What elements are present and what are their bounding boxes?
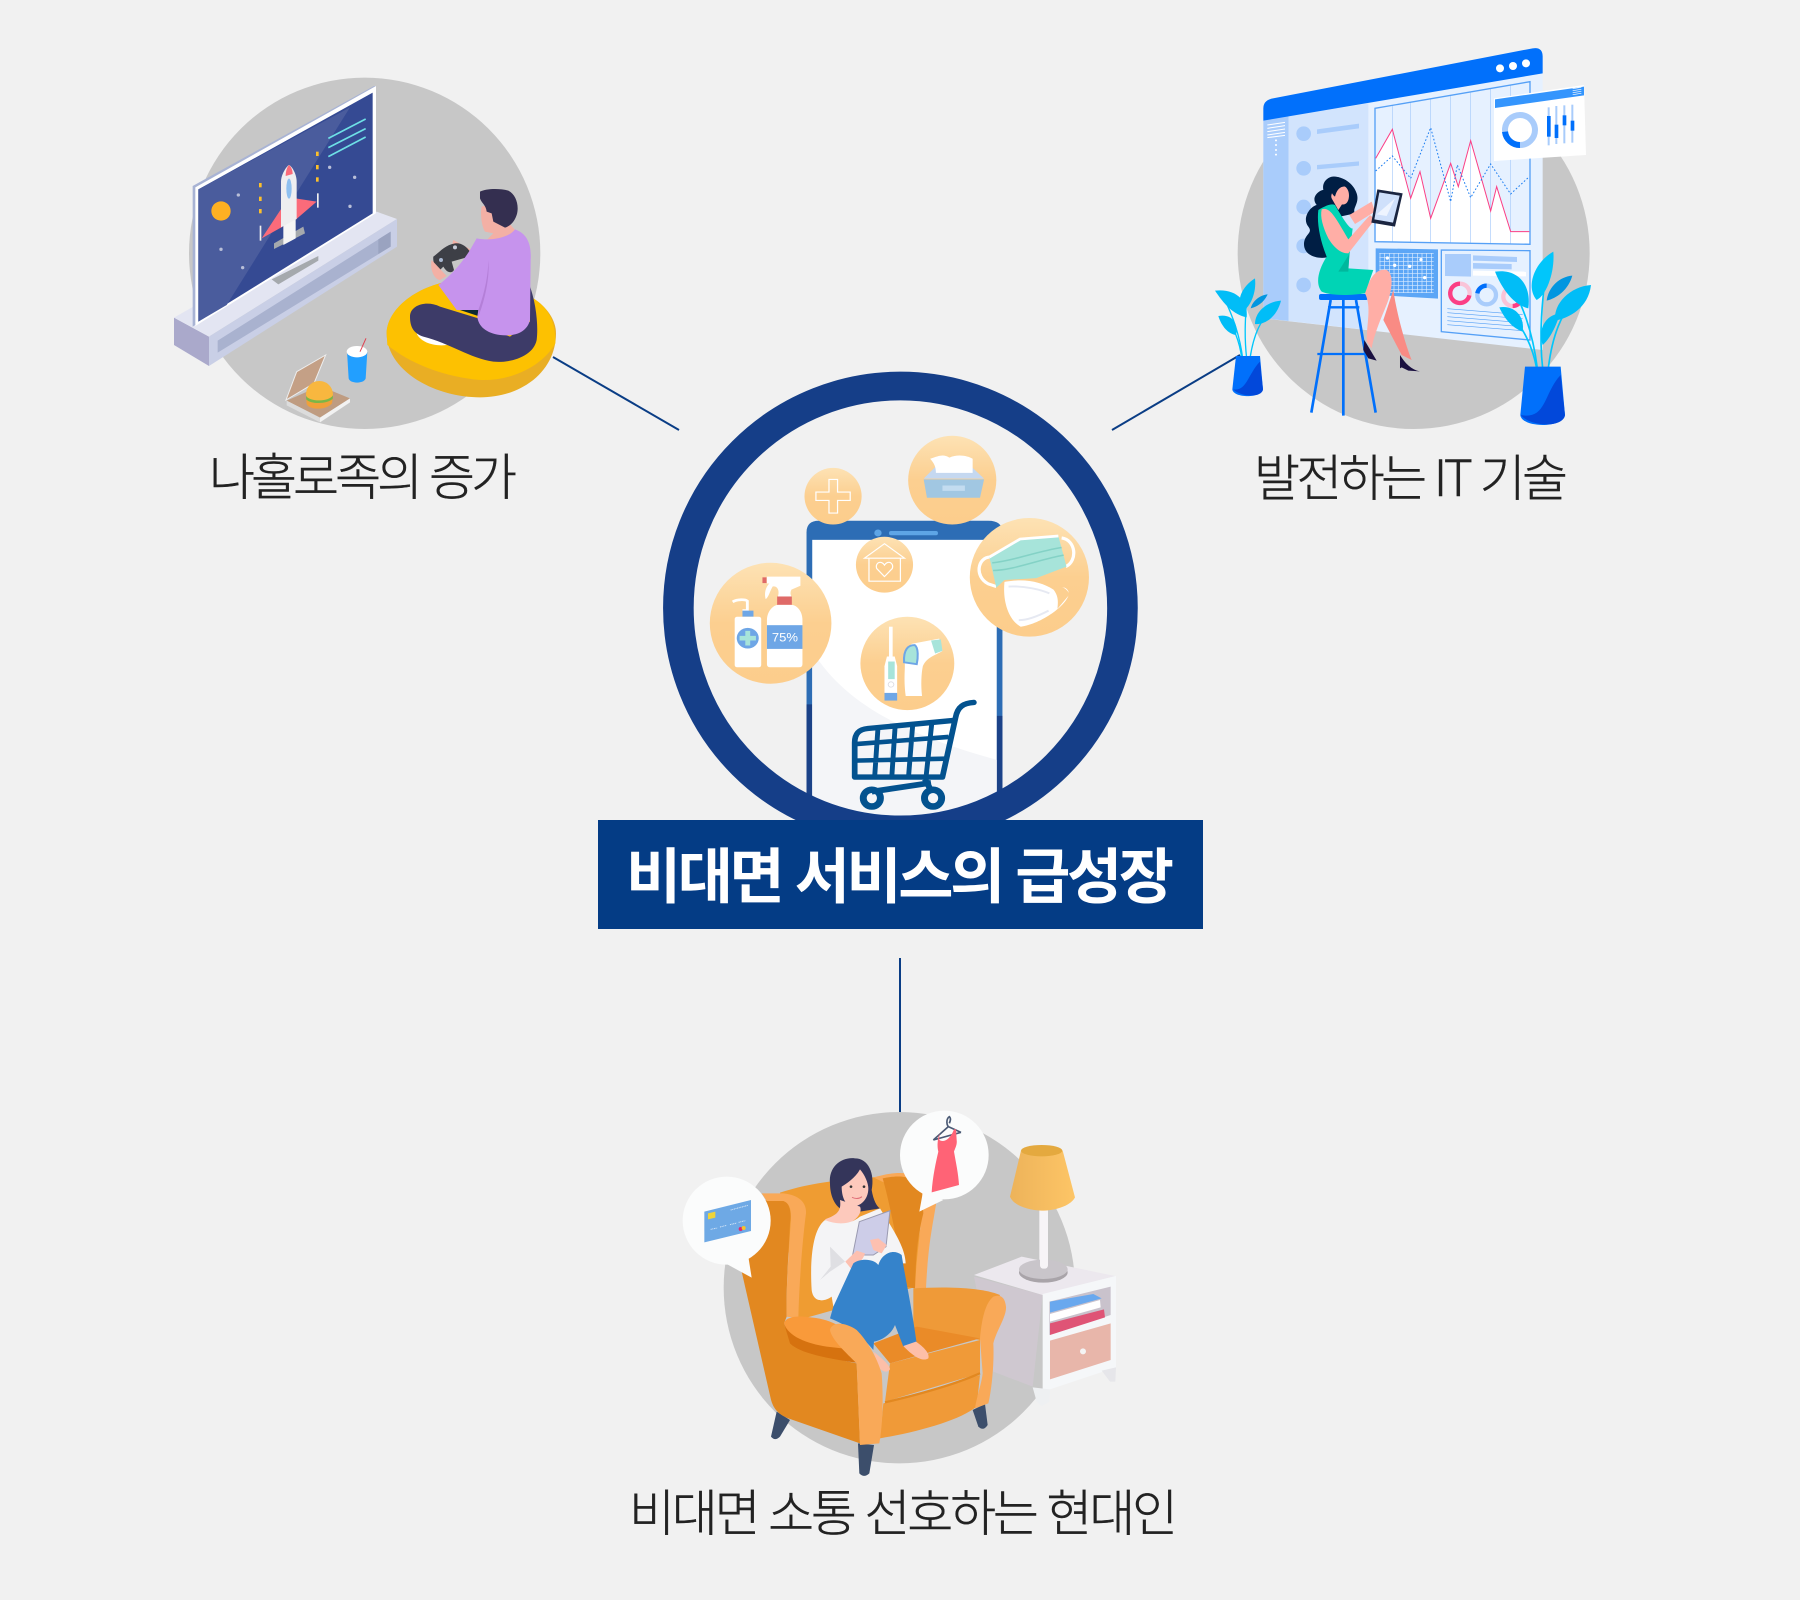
connector line: centre to bottom xyxy=(899,958,901,1114)
ring xyxy=(678,386,1122,830)
connector line: IT to centre xyxy=(1112,355,1240,430)
label: IT technology: 발전하는 IT 기술 xyxy=(1254,439,1568,511)
connector line: gaming to centre xyxy=(553,357,679,430)
icon: stool xyxy=(1311,294,1376,416)
report panel xyxy=(1441,250,1530,340)
icon: large potted plant xyxy=(1495,252,1591,425)
panel: IT technology illustration xyxy=(1215,48,1591,429)
background circle xyxy=(1238,77,1590,429)
banner xyxy=(598,820,1203,929)
label: contactless communication: 비대면 소통 선호하는 현대인 xyxy=(629,1474,1178,1546)
icon: tv with rocket game xyxy=(193,86,376,327)
icon: tissue box bubble xyxy=(908,436,996,525)
icon: man playing game xyxy=(410,189,537,362)
icon: sanitizer bottles bubble xyxy=(710,563,831,684)
icon: red dress bubble xyxy=(900,1111,989,1212)
icon: credit card bubble xyxy=(683,1177,771,1278)
icon: woman with tablet xyxy=(811,1158,929,1445)
dashboard window xyxy=(1263,48,1543,350)
banner title: 비대면 서비스의 급성장 xyxy=(626,829,1174,916)
icon: burger box xyxy=(286,355,350,422)
panel: central contactless services xyxy=(678,386,1122,838)
icon: house heart bubble xyxy=(856,537,913,593)
icon: yellow floor cushion xyxy=(387,280,556,397)
line chart xyxy=(1375,82,1530,244)
icon: orange armchair xyxy=(742,1173,1006,1443)
label: solo gamers: 나홀로족의 증가 xyxy=(209,438,517,510)
icon: woman with tablet xyxy=(1304,177,1420,371)
popup card with donut and candles xyxy=(1494,85,1586,161)
icon: chair legs xyxy=(771,1404,988,1476)
icon: sanitizer bottles bubble: 75% xyxy=(772,631,798,645)
icon: smartphone xyxy=(807,521,1002,838)
icon: drink cup xyxy=(347,338,367,383)
icon: tv stand xyxy=(174,212,397,366)
background circle xyxy=(189,78,540,429)
icon: bedside table xyxy=(974,1257,1116,1406)
icon: shopping cart xyxy=(854,702,974,807)
panel: solo gaming illustration xyxy=(174,78,556,429)
grid panel xyxy=(1376,248,1438,299)
panel: contactless shopping illustration xyxy=(683,1111,1116,1476)
icon: small potted plant xyxy=(1215,278,1281,396)
icon: medical cross bubble xyxy=(804,468,862,525)
icon: face masks bubble xyxy=(970,518,1089,637)
background circle xyxy=(724,1112,1075,1463)
icon: thermometers bubble xyxy=(860,617,954,710)
icon: lamp xyxy=(1010,1145,1075,1283)
